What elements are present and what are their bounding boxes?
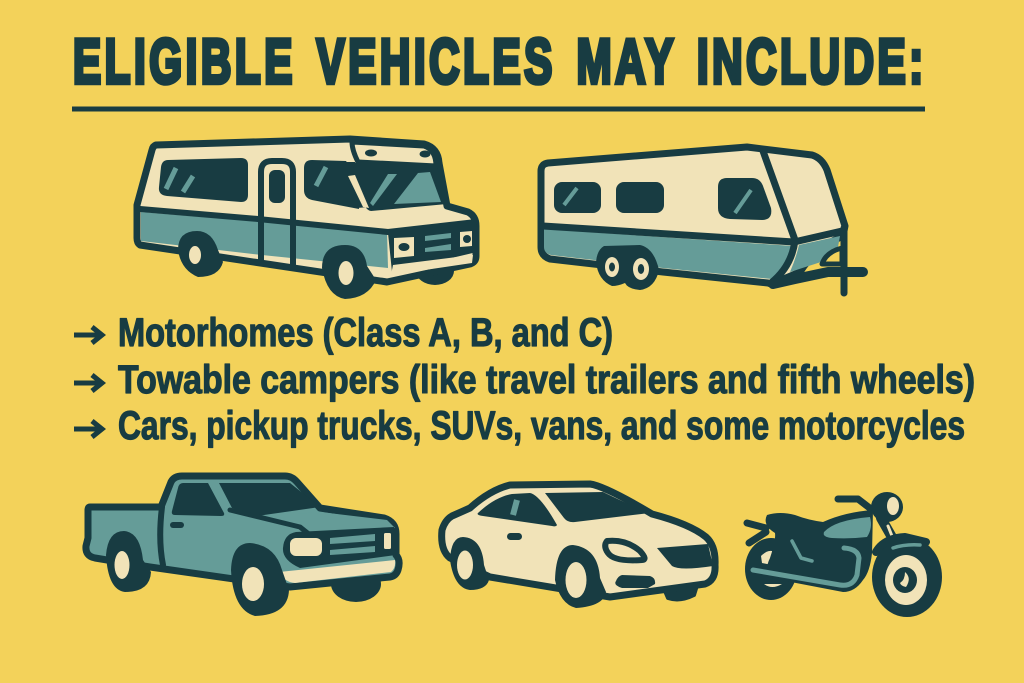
cab pillar xyxy=(160,507,163,565)
window glints xyxy=(564,188,751,213)
side window xyxy=(304,160,359,209)
trailer stripe xyxy=(543,226,842,242)
title underline xyxy=(72,106,925,112)
motorhome body xyxy=(137,139,476,282)
windshield glass xyxy=(394,172,441,204)
grille area xyxy=(283,527,396,568)
front wheel xyxy=(872,537,942,617)
icon: motorhome xyxy=(137,139,477,299)
fork xyxy=(881,518,897,546)
wheel arch near hitch xyxy=(822,248,842,264)
rear wheel xyxy=(106,531,151,592)
icon: pickup truck xyxy=(86,476,399,616)
headlight left xyxy=(394,237,414,258)
far front wheel xyxy=(416,257,454,285)
motorhome lower teal panel xyxy=(141,212,388,268)
tail and pegs xyxy=(747,523,766,543)
front wheel xyxy=(231,543,289,616)
windshield xyxy=(219,483,320,516)
roof lights xyxy=(365,150,377,156)
window 3 xyxy=(718,178,771,220)
rear wheel xyxy=(745,538,797,600)
motorcycle frame and seat xyxy=(766,510,873,592)
windshield xyxy=(352,163,447,211)
front wheel xyxy=(322,245,376,299)
frame accent xyxy=(792,541,812,561)
fuel tank xyxy=(824,517,871,538)
motorhome door xyxy=(261,161,293,268)
truck body xyxy=(86,476,399,587)
rear window xyxy=(159,158,248,202)
door window xyxy=(269,170,285,203)
cab-over roof xyxy=(352,142,436,166)
rear wheel xyxy=(178,231,223,277)
door handle xyxy=(170,522,184,528)
icon: sedan car xyxy=(442,484,715,608)
exhaust pipe xyxy=(753,548,859,585)
trailer lower teal panel xyxy=(544,229,793,279)
handlebar xyxy=(838,499,871,509)
glint xyxy=(513,500,517,515)
window 2 xyxy=(616,182,664,213)
rear side window xyxy=(478,493,557,526)
grille bars xyxy=(330,534,375,555)
headlight left xyxy=(290,538,322,556)
window glints xyxy=(166,167,326,192)
hitch xyxy=(773,272,863,284)
bullet 1: Motorhomes (Class A, B, and C) xyxy=(118,311,613,355)
rear wheel xyxy=(450,537,489,590)
far wheel xyxy=(331,566,381,602)
lower intake xyxy=(615,575,655,588)
car body xyxy=(442,484,715,597)
title: ELIGIBLE VEHICLES MAY INCLUDE: xyxy=(73,27,923,97)
motorhome belt line xyxy=(140,209,476,232)
front fender xyxy=(876,537,926,552)
front wheel xyxy=(555,545,606,608)
tandem wheels xyxy=(596,245,659,290)
bumper xyxy=(279,560,395,583)
icon: motorcycle xyxy=(745,492,942,617)
icon: travel trailer xyxy=(541,147,863,293)
headlight xyxy=(605,541,645,560)
window 1 xyxy=(554,182,601,213)
headlight right xyxy=(384,533,391,549)
hood line xyxy=(230,510,310,535)
door handle xyxy=(507,533,522,540)
headlamp xyxy=(871,492,903,522)
trailer body xyxy=(541,147,845,284)
windshield xyxy=(545,492,650,522)
grille xyxy=(657,544,713,568)
hood xyxy=(257,512,395,532)
grille bars xyxy=(425,233,451,252)
bumper xyxy=(391,255,473,275)
front grille area xyxy=(388,222,477,272)
cab window xyxy=(172,483,224,516)
far wheel xyxy=(662,582,698,599)
bullet list xyxy=(74,311,975,448)
trailer front seam xyxy=(763,151,795,283)
headlight right xyxy=(460,231,472,247)
